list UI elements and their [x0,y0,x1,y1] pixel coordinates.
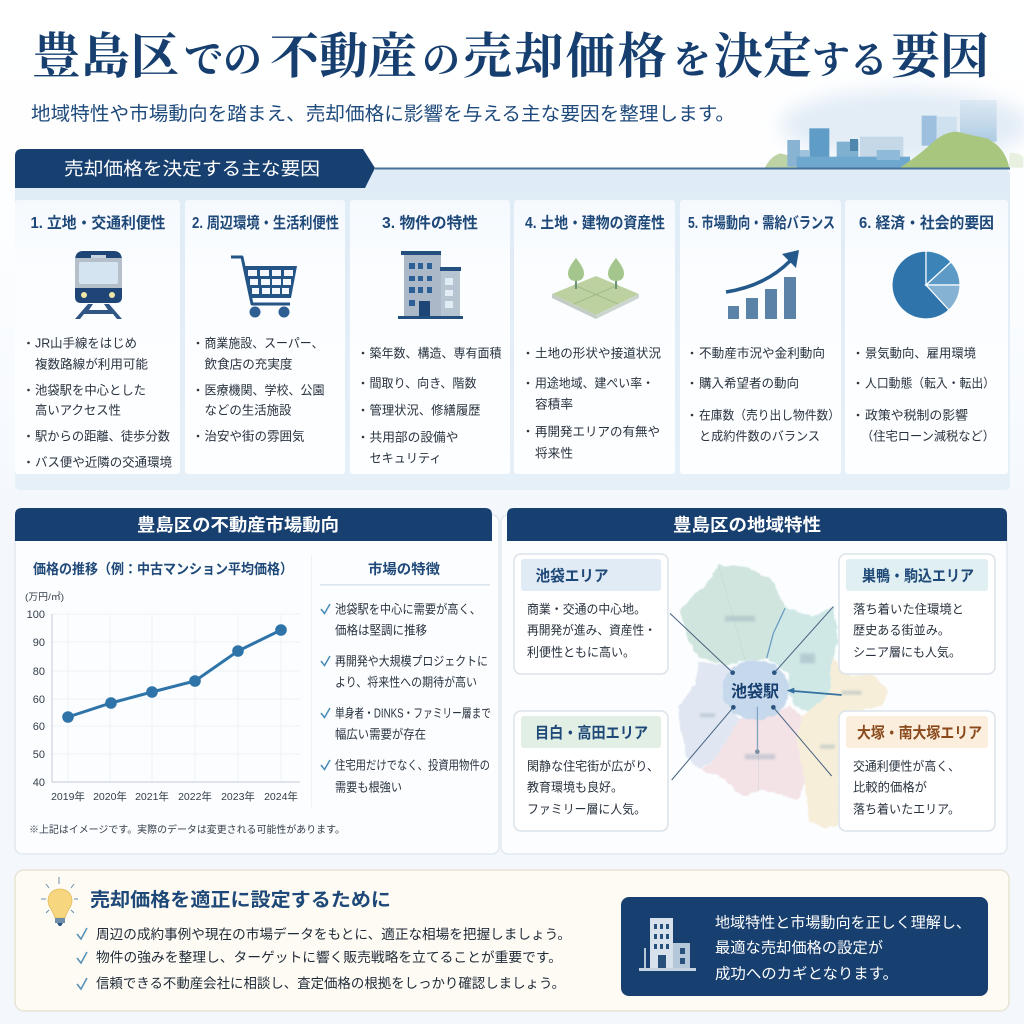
bullet list: 医療機関、学校、公園 [204,382,324,398]
line chart: 90 [33,637,45,649]
bullet list: 用途地域、建ぺい率・ [535,376,654,390]
area card: Otsuka [839,711,995,831]
bullet list: 築年数、構造、専有面積 [370,346,502,360]
title: する [812,40,888,82]
area card: Mejiro Takada: ファミリー層に人気。 [527,802,646,816]
map label: station: 池袋駅 [731,682,779,701]
chart heading: 価格の推移（例：中古マンション平均価格） [33,561,293,577]
bullet list: JR山手線をはじめ [35,336,137,350]
area card: Mejiro Takada: 教育環境も良好。 [527,780,623,794]
line chart: 2024年 [264,790,298,803]
title: 要因 [891,29,989,84]
line chart: 50 [33,749,45,761]
bullet list: 将来性 [535,446,573,460]
bullet list: 再開発エリアの有無や [535,424,660,439]
heading: 1. 立地・交通利便性 [30,213,166,232]
panel: advice [15,870,1009,1011]
bullet list: 治安や街の雰囲気 [204,428,304,444]
area card: Sugamo Komagome: 巣鴨・駒込エリア [862,566,974,585]
line chart: 2020年 [93,790,127,803]
bullet list: 間取り、向き、階数 [370,376,477,390]
market features heading: 市場の特徴 [368,561,440,577]
callout: conclusion: 成功へのカギとなります。 [715,966,898,982]
market features list: 池袋駅を中心に需要が高く、 [335,602,481,616]
bullet list [527,346,661,460]
callout: conclusion: 最適な売却価格の設定が [715,940,883,956]
area card: Otsuka: 比較的価格が [853,780,927,794]
panel header [15,508,492,541]
title: 決定 [714,29,812,84]
bullet list: バス便や近隣の交通環境 [35,454,172,470]
footnote: ※上記はイメージです。実際のデータは変更される可能性があります。 [29,823,345,836]
bullet list: 共用部の設備や [370,430,458,444]
callout: conclusion [621,897,988,996]
heading: 6. 経済・社会的要因 [859,214,994,232]
market features list: 需要も根強い [335,780,402,794]
bullet list: 不動産市況や金利動向 [699,346,825,360]
icon: light bulb [41,877,78,926]
bullet list: 政策や税制の影響 [865,408,968,422]
bullet list [27,336,172,470]
bullet list: 商業施設、スーパー、 [204,336,324,350]
bullet list: セキュリティ [370,452,442,466]
area card: Ikebukuro: 商業・交通の中心地。 [527,602,646,616]
title: 豊島区 [32,29,179,84]
bullet list: 容積率 [535,396,573,412]
advice list: 物件の強みを整理し、ターゲットに響く販売戦略を立てることが重要です。 [96,950,562,965]
line chart: 2021年 [135,790,169,803]
heading: 5. 市場動向・需給バランス [688,213,835,232]
callout: conclusion: 地域特性と市場動向を正しく理解し、 [715,914,971,932]
bullet list: 景気動向、雇用環境 [865,346,976,360]
area card: Ikebukuro: 再開発が進み、資産性・ [527,622,656,638]
icon: shopping cart [231,257,297,318]
panel: main factors [15,149,1010,490]
line chart: 60 [33,694,45,706]
card 2: surroundings [185,200,345,474]
advice list [77,926,571,991]
market features list: 価格は堅調に推移 [335,622,427,638]
subtitle: 地域特性や市場動向を踏まえ、売却価格に影響を与える主な要因を整理します。 [31,103,735,125]
area card: Otsuka: 交通利便性が高く、 [853,758,960,774]
panel header: 豊島区の地域特性 [673,515,821,535]
bullet list: 飲食店の充実度 [204,356,292,372]
bullet list: と成約件数のバランス [699,428,820,444]
card 4: land [514,200,675,474]
bullet list [197,336,324,444]
title: を [673,40,711,82]
bullet list: 高いアクセス性 [35,402,121,418]
advice heading: 売却価格を適正に設定するために [90,889,391,911]
district map [670,565,888,828]
skyline illustration [765,89,1024,168]
bullet list: 池袋駅を中心とした [35,382,146,398]
card 1: location [15,200,180,474]
panel header: 豊島区の不動産市場動向 [137,515,339,535]
section ribbon: 売却価格を決定する主な要因 [64,159,320,179]
line chart: 60 [33,721,45,733]
area card: Mejiro Takada [514,711,668,831]
bullet list: 複数路線が利用可能 [35,356,148,372]
bullet list: 管理状況、修繕履歴 [370,402,480,418]
area card: Sugamo Komagome: シニア層にも人気。 [853,644,961,660]
area card: Mejiro Takada: 閑静な住宅街が広がり、 [527,758,659,774]
line chart: 100 [27,609,45,621]
line chart: 40 [33,777,45,789]
heading: 4. 土地・建物の資産性 [525,213,665,232]
line chart: 2023年 [221,790,255,803]
line chart: 2019年 [51,790,85,803]
bullet list [691,346,840,444]
line chart: (万円/㎡) [25,592,64,603]
title: の [422,40,460,82]
area card: Ikebukuro: 池袋エリア [536,567,608,585]
advice list: 周辺の成約事例や現在の市場データをもとに、適正な相場を把握しましょう。 [96,926,571,942]
bullet list: 人口動態（転入・転出） [865,376,995,390]
bullet list [362,346,502,466]
panel header [507,508,1007,541]
line chart: 80 [33,666,45,678]
bullet list: 駅からの距離、徒歩分数 [35,428,170,444]
market features list: 住宅用だけでなく、投資用物件の [335,758,490,772]
panel: market trends [15,508,499,854]
icon: office building [639,918,696,971]
area card: Mejiro Takada: 目白・高田エリア [535,724,648,742]
section ribbon [15,149,375,188]
bullet list: 購入希望者の動向 [699,376,799,390]
area card: Sugamo Komagome [839,554,995,674]
market features list: 再開発や大規模プロジェクトに [335,654,488,668]
area card: Otsuka: 落ち着いたエリア。 [853,802,960,816]
panel: area characteristics [501,508,1007,854]
bullet list [857,346,995,444]
heading: 2. 周辺環境・生活利便性 [192,213,339,232]
line chart: 2022年 [178,790,212,803]
title: 売却価格 [463,29,669,84]
icon: pie chart [892,251,960,319]
area card: Otsuka: 大塚・南大塚エリア [857,724,982,742]
area card: Sugamo Komagome: 歴史ある街並み。 [853,624,950,638]
market features list: 幅広い需要が存在 [335,726,426,742]
market features list: より、将来性への期待が高い [335,674,477,690]
icon: land plot with trees [552,258,639,319]
market features list: 単身者・DINKS・ファミリー層まで [335,706,491,720]
bullet list: 在庫数（売り出し物件数） [699,408,840,422]
area card: Ikebukuro: 利便性ともに高い。 [527,644,635,660]
bullet list: （住宅ローン減税など） [861,428,995,444]
bullet list: 土地の形状や接道状況 [535,346,661,360]
line chart [25,592,300,803]
title: での [184,39,262,82]
heading: 3. 物件の特性 [382,213,478,232]
advice list: 信頼できる不動産会社に相談し、査定価格の根拠をしっかり確認しましょう。 [96,976,565,991]
icon: train [75,251,122,319]
icon: building [398,251,463,319]
icon: rising bar chart [726,250,799,319]
area card: Sugamo Komagome: 落ち着いた住環境と [853,602,964,616]
card 3: property [350,200,510,474]
area card: Ikebukuro [514,554,668,674]
card 5: market [680,200,841,474]
card 6: economy [845,200,1008,474]
market features list [321,602,491,794]
bullet list: などの生活施設 [204,404,292,418]
title: 不動産 [270,29,417,84]
